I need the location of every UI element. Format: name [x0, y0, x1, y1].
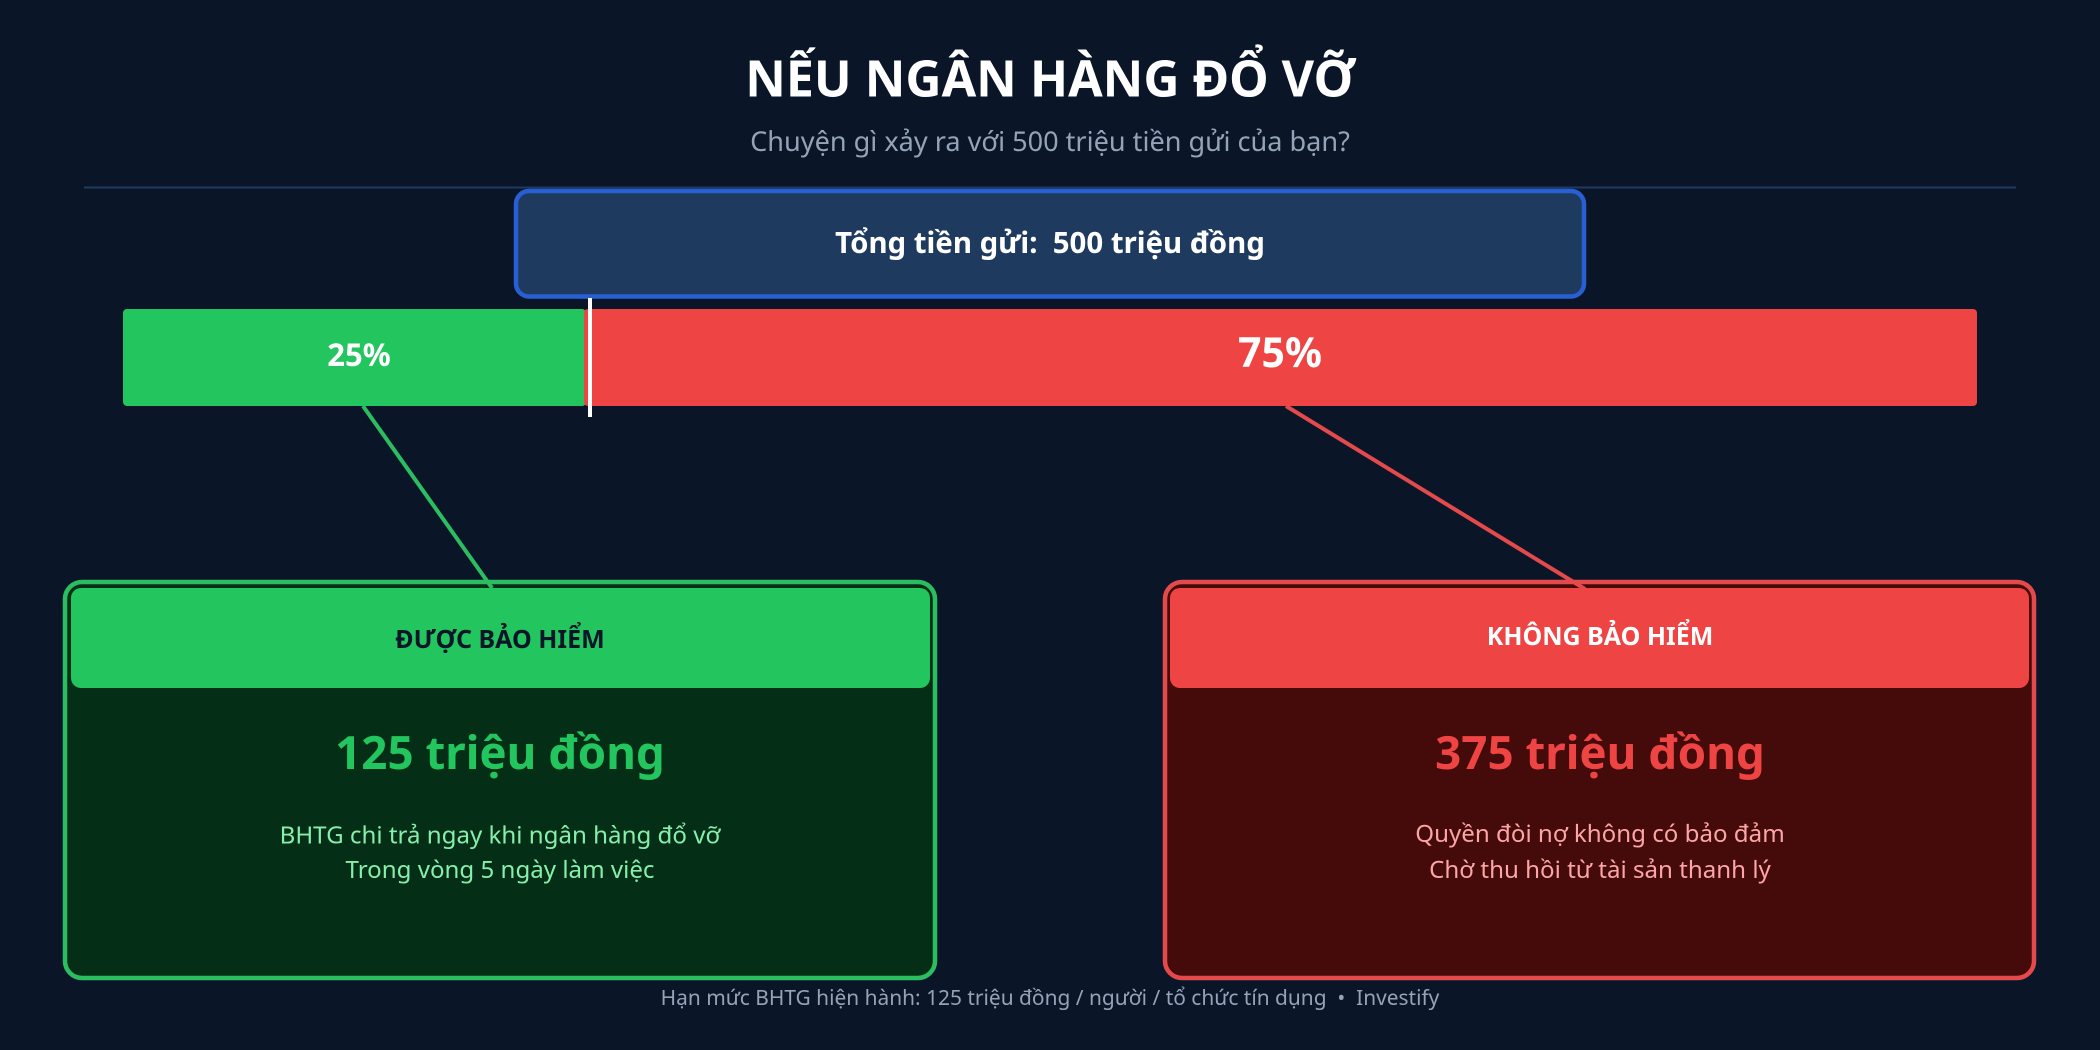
description: uninsured — [1415, 817, 1785, 886]
panel header: insured: ĐƯỢC BẢO HIỂM — [395, 622, 605, 656]
segment: 25%: 25% — [327, 334, 391, 376]
connector: red — [1286, 406, 1585, 589]
amount: insured: 125 triệu đồng — [335, 721, 665, 783]
description: insured: BHTG chi trả ngay khi ngân hàng đổ vỡ — [280, 818, 721, 852]
description: insured: Trong vòng 5 ngày làm việc — [346, 853, 654, 886]
segment: 75% — [584, 309, 1977, 406]
panel: insured — [65, 582, 935, 978]
description: uninsured: Quyền đòi nợ không có bảo đảm — [1415, 817, 1785, 850]
panel: uninsured — [1165, 582, 2034, 978]
subtitle: Chuyện gì xảy ra với 500 triệu tiền gửi của bạn? — [750, 122, 1350, 159]
total deposit box: Tổng tiền gửi: 500 triệu đồng — [835, 222, 1265, 262]
segment: 75%: 75% — [1238, 324, 1322, 380]
panel header: insured — [71, 588, 930, 688]
connector: green — [363, 406, 492, 588]
segment: 25% — [123, 309, 586, 406]
amount: uninsured: 375 triệu đồng — [1435, 721, 1765, 783]
footer note: Hạn mức BHTG hiện hành: 125 triệu đồng / người / tổ chức tín dụng • Investify — [661, 984, 1440, 1012]
title: NẾU NGÂN HÀNG ĐỔ VỠ — [745, 44, 1357, 112]
panel header: uninsured: KHÔNG BẢO HIỂM — [1487, 619, 1713, 653]
split marker — [588, 298, 592, 417]
description: insured — [280, 818, 721, 886]
description: uninsured: Chờ thu hồi từ tài sản thanh lý — [1429, 853, 1772, 886]
stacked bar: 25% insured, 75% uninsured — [123, 298, 1977, 417]
panel header: uninsured — [1170, 588, 2029, 688]
total deposit box — [516, 191, 1584, 296]
